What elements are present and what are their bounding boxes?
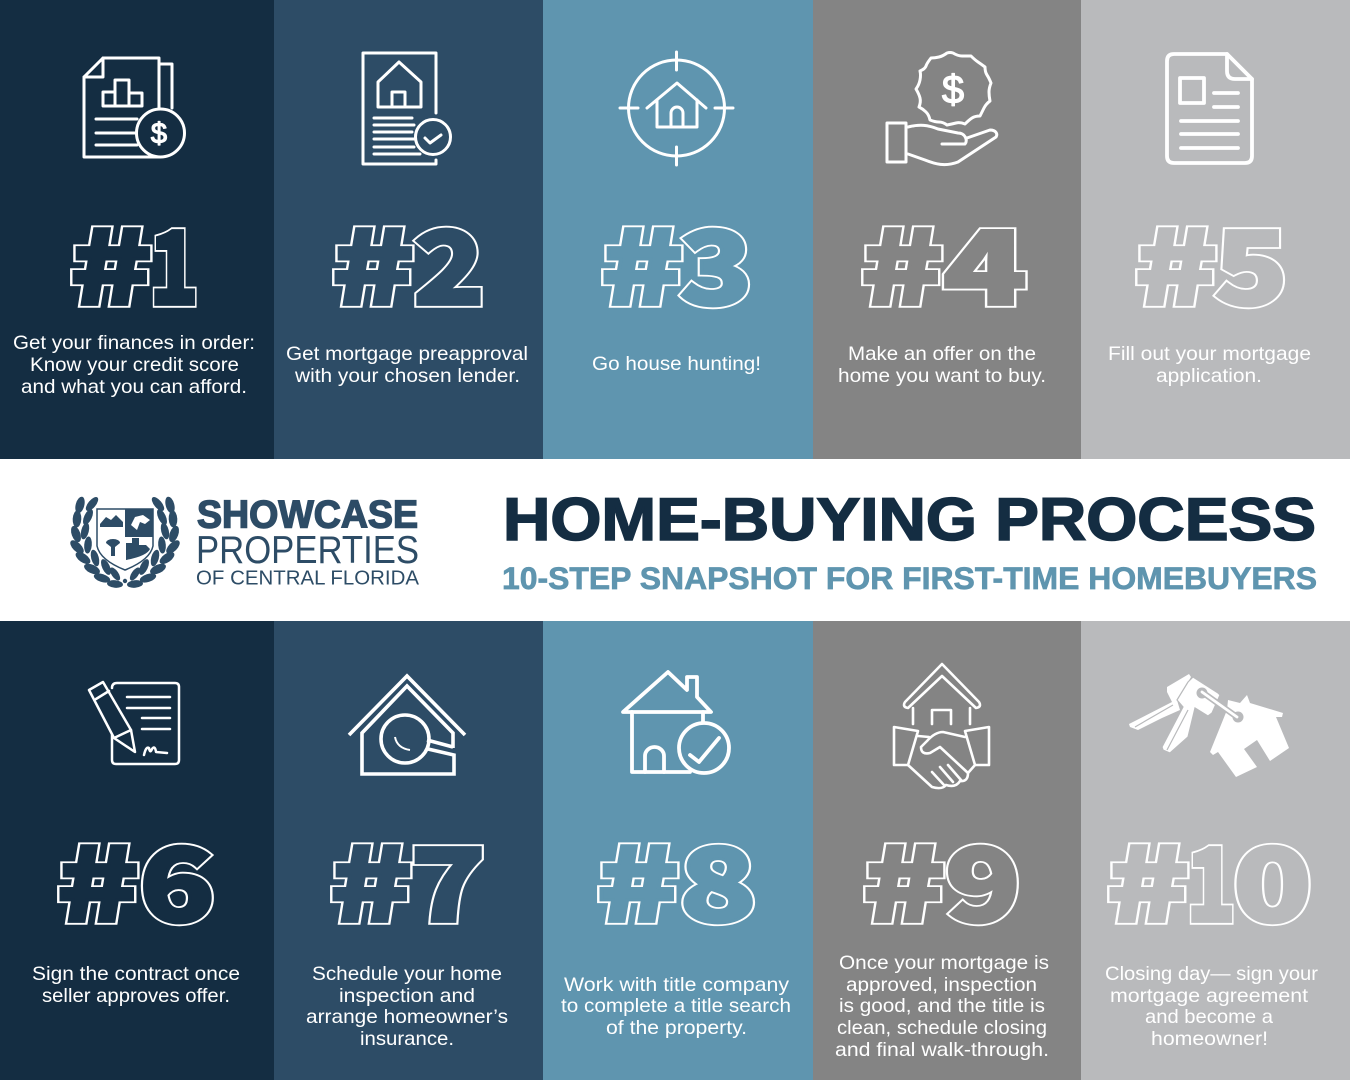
step number 1: 1	[149, 188, 199, 334]
panel: step 1	[0, 0, 274, 459]
icon: financial document with dollar coin: $	[151, 118, 167, 150]
icon: contract and pen	[89, 682, 179, 764]
step 10 text: mortgage agreement	[1110, 985, 1309, 1007]
panel: step 8	[543, 621, 813, 1080]
step 9 text: Once your mortgage is	[839, 952, 1049, 974]
panel: step 9	[813, 621, 1081, 1080]
step number 1: 1	[149, 188, 199, 334]
step number 1: #	[69, 188, 153, 334]
icon: home inspection	[349, 676, 465, 774]
step 2 text: with your chosen lender.	[294, 365, 520, 387]
step number 8: #	[596, 804, 680, 952]
step number 6	[56, 804, 215, 952]
step 2 text	[286, 343, 528, 387]
icon: house document with check	[363, 53, 450, 164]
logo: wordmark: PROPERTIES	[196, 529, 419, 572]
step number 9: 9	[945, 804, 1021, 952]
logo: wordmark: SHOWCASE	[197, 494, 418, 536]
shield	[97, 509, 153, 570]
step 1 text: Get your finances in order:	[13, 332, 255, 354]
step 2 text: Get mortgage preapproval	[286, 343, 528, 365]
title: HOME-BUYING PROCESS	[503, 486, 1316, 553]
step number 9: 9	[945, 804, 1021, 952]
step number 10	[1106, 804, 1312, 952]
step 8 text: to complete a title search	[561, 995, 791, 1017]
subtitle: 10-STEP SNAPSHOT FOR FIRST-TIME HOMEBUYERS	[502, 560, 1317, 596]
step number 8: 8	[679, 804, 757, 952]
step number 8: #	[596, 804, 680, 952]
step number 4: 4	[943, 188, 1027, 334]
step number 4: 4	[943, 188, 1027, 334]
icon: keys and house keychain	[1129, 674, 1289, 777]
step number 1: #	[69, 188, 153, 334]
step number 3: 3	[679, 188, 753, 334]
step number 2	[331, 188, 485, 334]
step number 10: 0	[1233, 804, 1312, 952]
step number 9: #	[862, 804, 946, 952]
logo: wordmark	[196, 494, 419, 590]
step number 5	[1134, 188, 1288, 334]
panel: step 5	[1081, 0, 1350, 459]
step number 6: #	[56, 804, 140, 952]
step 1 text: and what you can afford.	[21, 376, 247, 398]
step number 5: 5	[1214, 188, 1288, 334]
step number 6: #	[56, 804, 140, 952]
step 7 text: inspection and	[339, 985, 475, 1007]
step number 5: #	[1134, 188, 1218, 334]
step number 7: #	[329, 804, 413, 952]
step 5 text: Fill out your mortgage	[1108, 343, 1311, 365]
panel: step 2	[274, 0, 543, 459]
logo: laurel crest	[68, 495, 182, 588]
step number 8: 8	[679, 804, 757, 952]
step number 7: #	[329, 804, 413, 952]
step number 6: 6	[139, 804, 215, 952]
step number 7	[329, 804, 486, 952]
icon: house with check	[623, 672, 729, 773]
step 1 text	[13, 332, 255, 398]
step number 2: 2	[413, 188, 485, 334]
step number 8	[596, 804, 757, 952]
step 9 text	[835, 952, 1049, 1061]
step 1 text: Know your credit score	[30, 354, 239, 376]
step number 6: 6	[139, 804, 215, 952]
panel: step 6	[0, 621, 274, 1080]
step number 10: 1	[1186, 804, 1236, 952]
step number 3: 3	[679, 188, 753, 334]
step number 10: 1	[1186, 804, 1236, 952]
icon: financial document with dollar coin	[84, 58, 184, 157]
step 6 text: seller approves offer.	[42, 985, 230, 1007]
step number 10: #	[1106, 804, 1190, 952]
step number 3	[600, 188, 753, 334]
step 10 text: Closing day— sign your	[1105, 963, 1319, 985]
step number 9	[862, 804, 1021, 952]
step number 5: 5	[1214, 188, 1288, 334]
step number 10: #	[1106, 804, 1190, 952]
icon: application form	[1167, 54, 1252, 163]
step number 7: 7	[410, 804, 486, 952]
step number 4: #	[860, 188, 944, 334]
step 8 text: of the property.	[606, 1017, 747, 1039]
step number 2: #	[331, 188, 415, 334]
step 9 text: approved, inspection	[846, 974, 1037, 996]
step 10 text: homeowner!	[1151, 1028, 1268, 1050]
step 6 text: Sign the contract once	[32, 963, 240, 985]
header band	[0, 459, 1350, 621]
step number 7: 7	[410, 804, 486, 952]
icon: hand holding dollar coin	[887, 52, 997, 165]
laurel left and right	[68, 495, 182, 588]
step 8 text: Work with title company	[564, 974, 789, 996]
step 5 text: application.	[1156, 365, 1262, 387]
step number 3: #	[600, 188, 684, 334]
step 7 text: arrange homeowner’s	[306, 1006, 508, 1028]
step number 4: #	[860, 188, 944, 334]
icon: house and handshake	[894, 664, 989, 788]
panel: step 10	[1081, 621, 1350, 1080]
step 7 text	[306, 963, 508, 1050]
step number 9: #	[862, 804, 946, 952]
step 6 text	[32, 963, 240, 1007]
step number 4	[860, 188, 1027, 334]
icon: house in crosshair	[620, 52, 733, 165]
logo: wordmark: OF CENTRAL FLORIDA	[196, 566, 419, 590]
step 5 text	[1108, 343, 1311, 387]
step number 5: #	[1134, 188, 1218, 334]
step number 10: 0	[1233, 804, 1312, 952]
step 7 text: insurance.	[360, 1028, 454, 1050]
step number 2: 2	[413, 188, 485, 334]
step number 2: #	[331, 188, 415, 334]
step 10 text	[1105, 963, 1319, 1050]
step 9 text: clean, schedule closing	[837, 1017, 1047, 1039]
step number 3: #	[600, 188, 684, 334]
step 3 text: Go house hunting!	[592, 353, 761, 375]
step 4 text: Make an offer on the	[848, 343, 1036, 365]
panel: step 3	[543, 0, 813, 459]
step 8 text	[561, 974, 791, 1039]
step 9 text: and final walk-through.	[835, 1039, 1049, 1061]
icon: hand holding dollar coin: $	[942, 68, 964, 112]
step number 1	[69, 188, 199, 334]
panel: step 7	[274, 621, 543, 1080]
step 4 text	[838, 343, 1046, 387]
step 7 text: Schedule your home	[312, 963, 502, 985]
panel: step 4	[813, 0, 1081, 459]
step 10 text: and become a	[1145, 1006, 1273, 1028]
step 4 text: home you want to buy.	[838, 365, 1046, 387]
step 9 text: is good, and the title is	[839, 995, 1045, 1017]
